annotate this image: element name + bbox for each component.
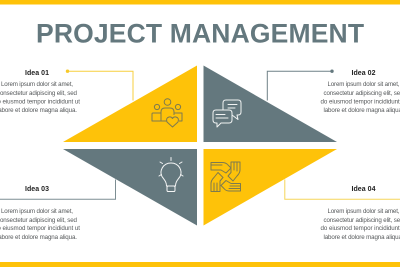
text block: idea 02: [320, 70, 400, 114]
text block: idea 02: Lorem ipsum dolor sit amet,: [328, 81, 400, 88]
triangle: idea 02: [204, 66, 337, 142]
icon: light bulb: [159, 158, 183, 192]
icon: joined hands: [211, 162, 240, 192]
icon: speech bubbles: [213, 100, 241, 127]
icon: team with heart: [152, 99, 182, 127]
connector: idea 03: [0, 180, 116, 199]
connector: idea 04: [285, 180, 400, 199]
text block: idea 03: Idea 03: [25, 186, 49, 193]
text block: idea 03: [0, 186, 80, 241]
bottom bar: [0, 262, 400, 267]
text block: idea 04: Idea 04: [352, 186, 376, 193]
text block: idea 03: Lorem ipsum dolor sit amet,: [1, 208, 73, 215]
top bar: [0, 0, 400, 4]
text block: idea 04: [320, 186, 400, 241]
connector: idea 02: [267, 70, 334, 100]
text block: idea 01: [0, 70, 80, 114]
connector: idea 01: [66, 70, 133, 100]
triangle: idea 04: [204, 149, 337, 226]
title: PROJECT MANAGEMENT: [36, 18, 364, 48]
triangle: idea 01: [63, 66, 197, 142]
text block: idea 01: Lorem ipsum dolor sit amet,: [1, 81, 73, 88]
triangle: idea 03: [63, 149, 197, 226]
text block: idea 04: Lorem ipsum dolor sit amet,: [328, 208, 400, 215]
text block: idea 01: Idea 01: [25, 70, 49, 77]
text block: idea 02: Idea 02: [352, 70, 376, 77]
